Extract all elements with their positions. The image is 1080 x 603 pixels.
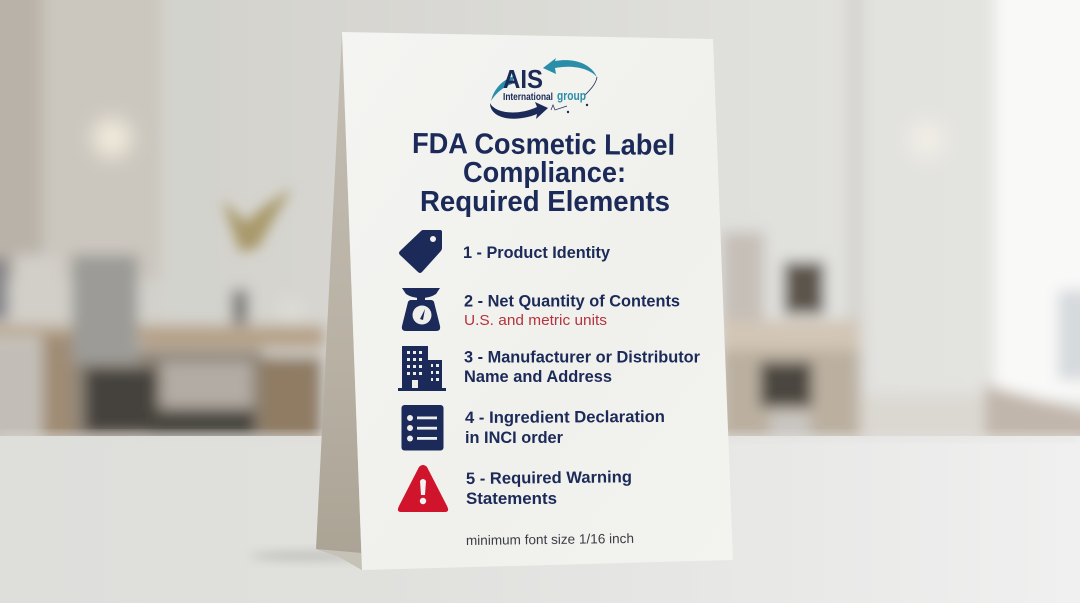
label: product identity: 1 - Product Identity: [463, 244, 611, 262]
title: Compliance:: [463, 157, 626, 189]
item 4: ingredient declaration: in INCI order: [465, 429, 564, 447]
icon: building: [398, 346, 446, 391]
item 1: product identity: [399, 230, 611, 273]
tent card: [316, 32, 733, 570]
item 2: net quantity: [402, 288, 680, 331]
item 3: manufacturer: [398, 346, 701, 391]
title: Required Elements: [420, 186, 670, 218]
logo: AIS International group: group: [557, 88, 586, 103]
icon: kitchen scale: [402, 288, 440, 331]
card shadow: [250, 552, 370, 560]
label: manufacturer or distributor: 3 - Manufacturer or Distributor: [464, 348, 701, 366]
item 4: ingredient declaration: [402, 405, 665, 450]
icon: list: [402, 405, 444, 450]
card side fold: [316, 32, 362, 570]
right furniture: [722, 232, 764, 320]
icon: warning triangle: [398, 465, 448, 512]
logo: AIS International group: AIS: [503, 64, 543, 94]
table surface: [0, 434, 1080, 603]
blurred office background: [0, 0, 1080, 450]
label: ingredient declaration: 4 - Ingredient Declaration: [465, 408, 665, 427]
item 3: manufacturer: Name and Address: [464, 368, 612, 386]
wall lamp left: [92, 118, 132, 158]
item 5: warning statements: [398, 465, 632, 512]
label: required warning statements: 5 - Required Warning: [466, 468, 632, 488]
logo: AIS International group: International: [503, 91, 553, 103]
item 5: warning statements: Statements: [466, 490, 557, 508]
decorative plant: [222, 188, 292, 252]
logo: AIS International group: [490, 58, 597, 119]
card front panel: [342, 32, 733, 570]
wall lamp right: [907, 120, 947, 160]
label: net quantity of contents: 2 - Net Quantity of Contents: [464, 292, 680, 310]
left furniture: [0, 258, 8, 320]
footnote: minimum font size: minimum font size 1/16 inch: [466, 531, 634, 548]
note: units: U.S. and metric units: [464, 312, 607, 329]
title: [412, 128, 675, 218]
title: FDA Cosmetic Label: [412, 128, 675, 162]
icon: price tag: [399, 230, 442, 273]
